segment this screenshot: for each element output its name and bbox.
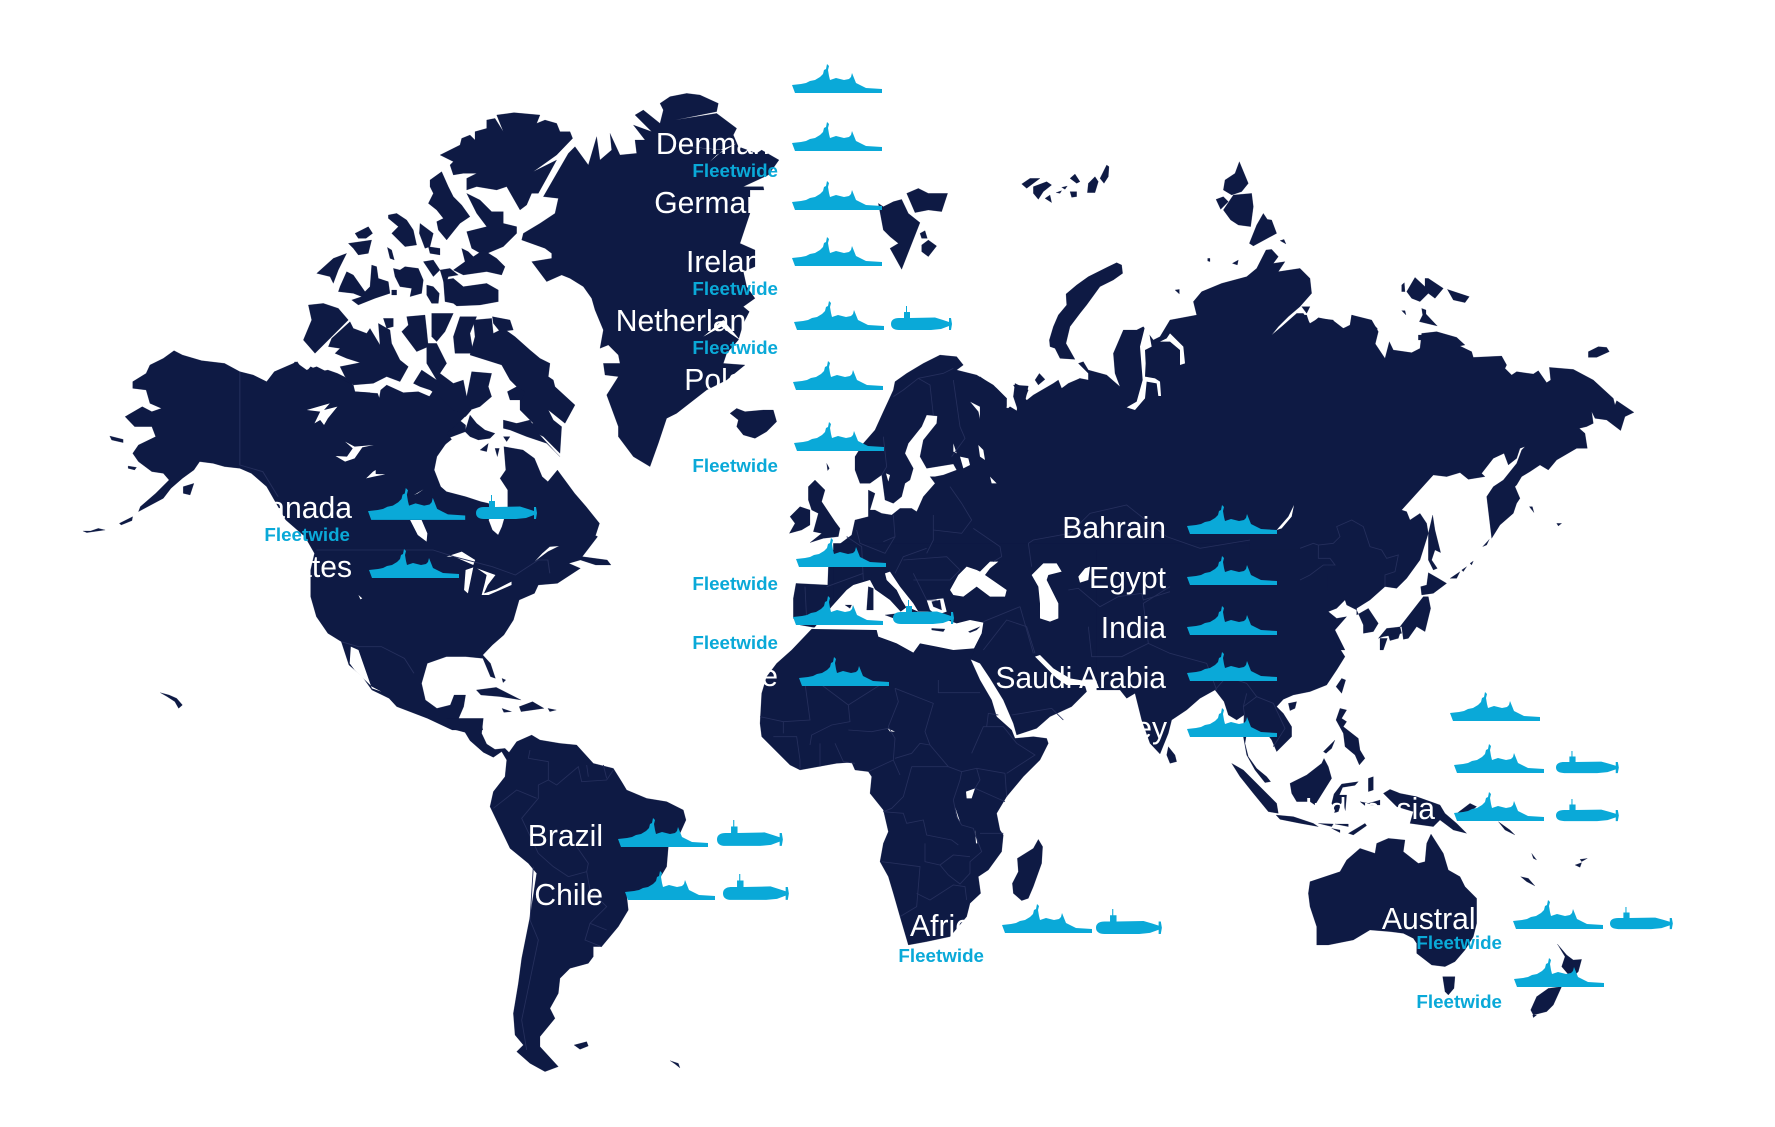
row: Indonesia: Indonesia <box>1304 793 1435 826</box>
landmass: eastern Russia, Korea and Japan <box>1300 277 1634 650</box>
landmass: Svalbard <box>878 188 948 269</box>
row: New Zealand: Fleetwide <box>1416 991 1502 1012</box>
row: European ship over France: Fleetwide <box>692 573 778 594</box>
row: Turkey <box>1076 708 1277 745</box>
Siberian gulfs and Lake Baikal <box>1127 327 1294 530</box>
row: Germany <box>654 181 882 220</box>
row: Germany: Germany <box>654 187 778 220</box>
row: France <box>684 657 889 693</box>
row: Bahrain <box>1062 505 1277 545</box>
row: Canada: Canada <box>247 492 352 525</box>
Canadian lakes and Gulf of California <box>307 403 512 692</box>
landmass: Australia, New Zealand and Indonesia <box>1232 708 1587 1018</box>
row: New Zealand <box>1416 958 1604 1012</box>
row: India <box>1101 606 1277 645</box>
landmass: Africa <box>760 629 1048 945</box>
landmass: North America <box>83 351 611 730</box>
Mediterranean, Black Sea and Caspian <box>813 562 1090 687</box>
row: European ship and submarine over Spain <box>692 596 954 653</box>
row: India: India <box>1101 612 1166 645</box>
landmass: Middle East and Central Asia <box>833 543 1250 735</box>
row: Chile <box>534 871 789 912</box>
row: Netherlands: Netherlands <box>616 305 778 338</box>
row: Saudi Arabia <box>995 652 1277 695</box>
row: Brazil <box>528 818 783 853</box>
row: Indonesia <box>1304 792 1619 826</box>
row: Bahrain: Bahrain <box>1062 512 1166 545</box>
row: Asia-Pacific ship <box>1450 692 1540 721</box>
row: South Africa <box>825 904 1162 966</box>
row: Denmark: Fleetwide <box>692 160 778 181</box>
row: United States: United States <box>171 551 352 584</box>
African lakes <box>888 728 977 843</box>
row: Turkey: Turkey <box>1076 712 1167 745</box>
row: Saudi Arabia: Saudi Arabia <box>995 662 1166 695</box>
Scandinavian and Russian lakes <box>886 443 997 483</box>
row: Australia: Australia <box>1382 903 1499 936</box>
row: European ship and submarine over Spain: Fleetwide <box>692 632 778 653</box>
row: Egypt: Egypt <box>1089 562 1167 595</box>
row: empty ship line <box>792 122 882 151</box>
row: South Africa: Fleetwide <box>898 945 984 966</box>
landmass: Europe and Scandinavia <box>789 355 1080 630</box>
Greenland and Arctic fjords <box>688 143 740 340</box>
row: Denmark <box>656 64 882 181</box>
row: Denmark: Denmark <box>656 128 779 161</box>
row: Chile: Chile <box>534 879 603 912</box>
row: Australia: Fleetwide <box>1416 932 1502 953</box>
row: France: France <box>684 660 778 693</box>
row: Brazil: Brazil <box>528 820 603 853</box>
row: Canada <box>247 488 537 545</box>
row: Canada: Fleetwide <box>264 524 350 545</box>
row: Egypt <box>1089 556 1277 595</box>
row: Asia-Pacific ship and submarine <box>1454 744 1619 773</box>
landmass: South and Southeast Asia <box>1097 550 1346 783</box>
row: Netherlands: Fleetwide <box>692 337 778 358</box>
row: European ship over France <box>692 538 886 594</box>
national borders <box>240 368 1398 1050</box>
landmass: South and Central America <box>447 718 686 1072</box>
landmass: Iceland <box>730 408 777 438</box>
row: Ireland <box>686 237 882 299</box>
row: Australia <box>1382 900 1673 953</box>
row: Poland <box>684 361 883 397</box>
row: Ireland: Ireland <box>686 246 778 279</box>
landmass: Novaya Zemlya <box>1049 263 1123 359</box>
row: Ireland: Fleetwide <box>692 278 778 299</box>
world map <box>83 93 1634 1072</box>
row: Netherlands <box>616 301 952 358</box>
Mediterranean islands <box>845 587 980 633</box>
row: European ship with Fleetwide tag: Fleetwide <box>692 455 778 476</box>
landmass: Canadian Arctic islands and Greenland <box>290 93 779 490</box>
landmass: western and central Russia <box>980 162 1380 550</box>
row: South Africa: South Africa <box>825 910 987 943</box>
row: United States <box>171 549 459 584</box>
landmass: Greenland <box>522 93 779 467</box>
row: European ship with Fleetwide tag <box>692 422 884 476</box>
row: Poland: Poland <box>684 364 778 397</box>
seas and lakes <box>307 143 1294 843</box>
